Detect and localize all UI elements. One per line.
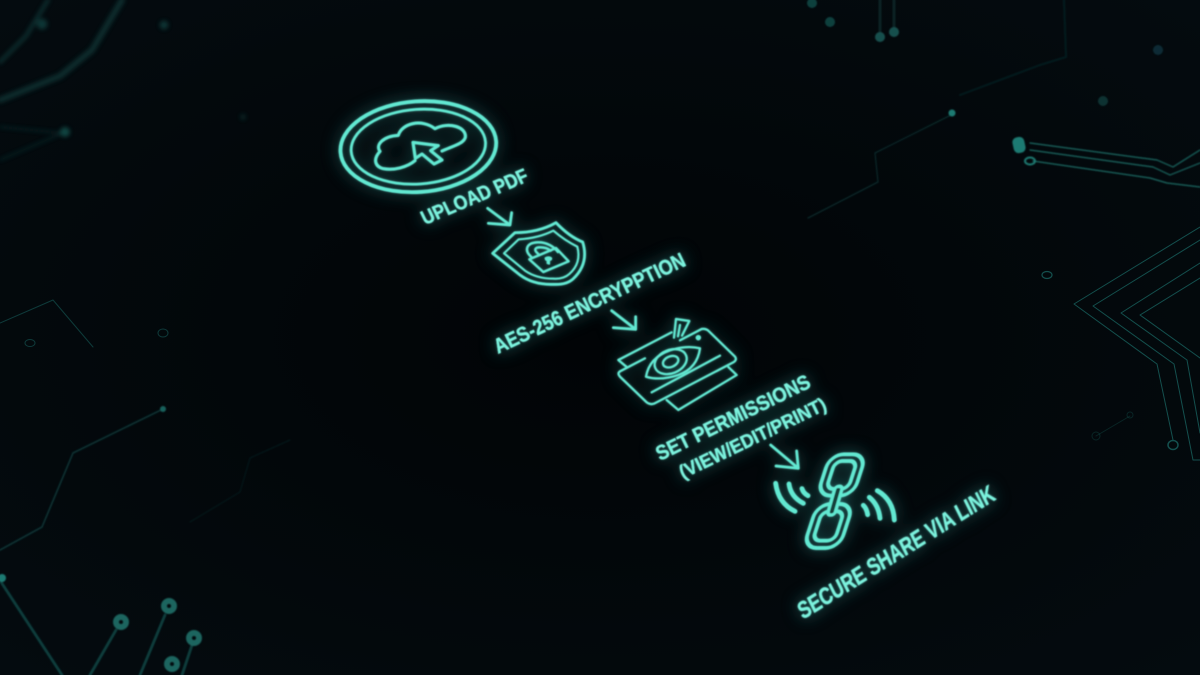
label: aes-256 encryption: AES-256 ENCRYPPTION: [490, 248, 689, 358]
label: set permissions: SET PERMISSIONS: [652, 371, 814, 465]
dot: [696, 335, 701, 340]
cloud: [376, 123, 465, 169]
bottom chain link: [803, 504, 853, 548]
keyhole: [545, 257, 551, 264]
iris: [651, 345, 690, 379]
center connector: [827, 486, 843, 515]
pupil: [661, 354, 680, 370]
label: view edit print: (VIEW/EDIT/PRINT): [676, 394, 830, 483]
arrow 2: [612, 311, 636, 329]
circuit traces: bottom left: [0, 406, 290, 675]
bottom link inner: [813, 511, 844, 541]
top tab: [674, 319, 689, 338]
upload arrow: [413, 142, 442, 164]
divider line: [652, 356, 720, 392]
label: secure share via link: SECURE SHARE VIA LINK: [793, 480, 999, 625]
circuit traces: mid left: [0, 300, 168, 347]
arrow 1: [488, 208, 512, 225]
circuit traces: right: [1042, 227, 1200, 460]
signal waves right: [863, 491, 894, 520]
top chain link: [817, 454, 866, 496]
label: upload pdf: UPLOAD PDF: [417, 165, 532, 229]
inner ring: [349, 105, 488, 189]
bottom link outer: [803, 504, 853, 548]
flow diagram: [337, 96, 999, 625]
signal waves left: [776, 483, 808, 511]
outer ring: [337, 96, 499, 197]
padlock body: [529, 248, 569, 272]
main body: [618, 329, 736, 404]
eye outline: [646, 347, 700, 378]
padlock shackle: [527, 242, 558, 257]
circuit traces: top left: [0, 0, 246, 160]
top link outer: [817, 454, 866, 496]
arrow 3: [771, 445, 798, 468]
back panel: [618, 332, 672, 367]
step 3: permissions icon: [618, 319, 737, 410]
step 4: link icon: [776, 454, 894, 548]
front tray: [667, 367, 737, 410]
shield outer: [493, 223, 585, 284]
step 2: shield icon: [493, 223, 585, 284]
circuit traces: top right: [807, 0, 1200, 218]
top link inner: [826, 461, 857, 489]
step 1: upload icon: [337, 96, 499, 197]
shield inner: [504, 231, 578, 279]
